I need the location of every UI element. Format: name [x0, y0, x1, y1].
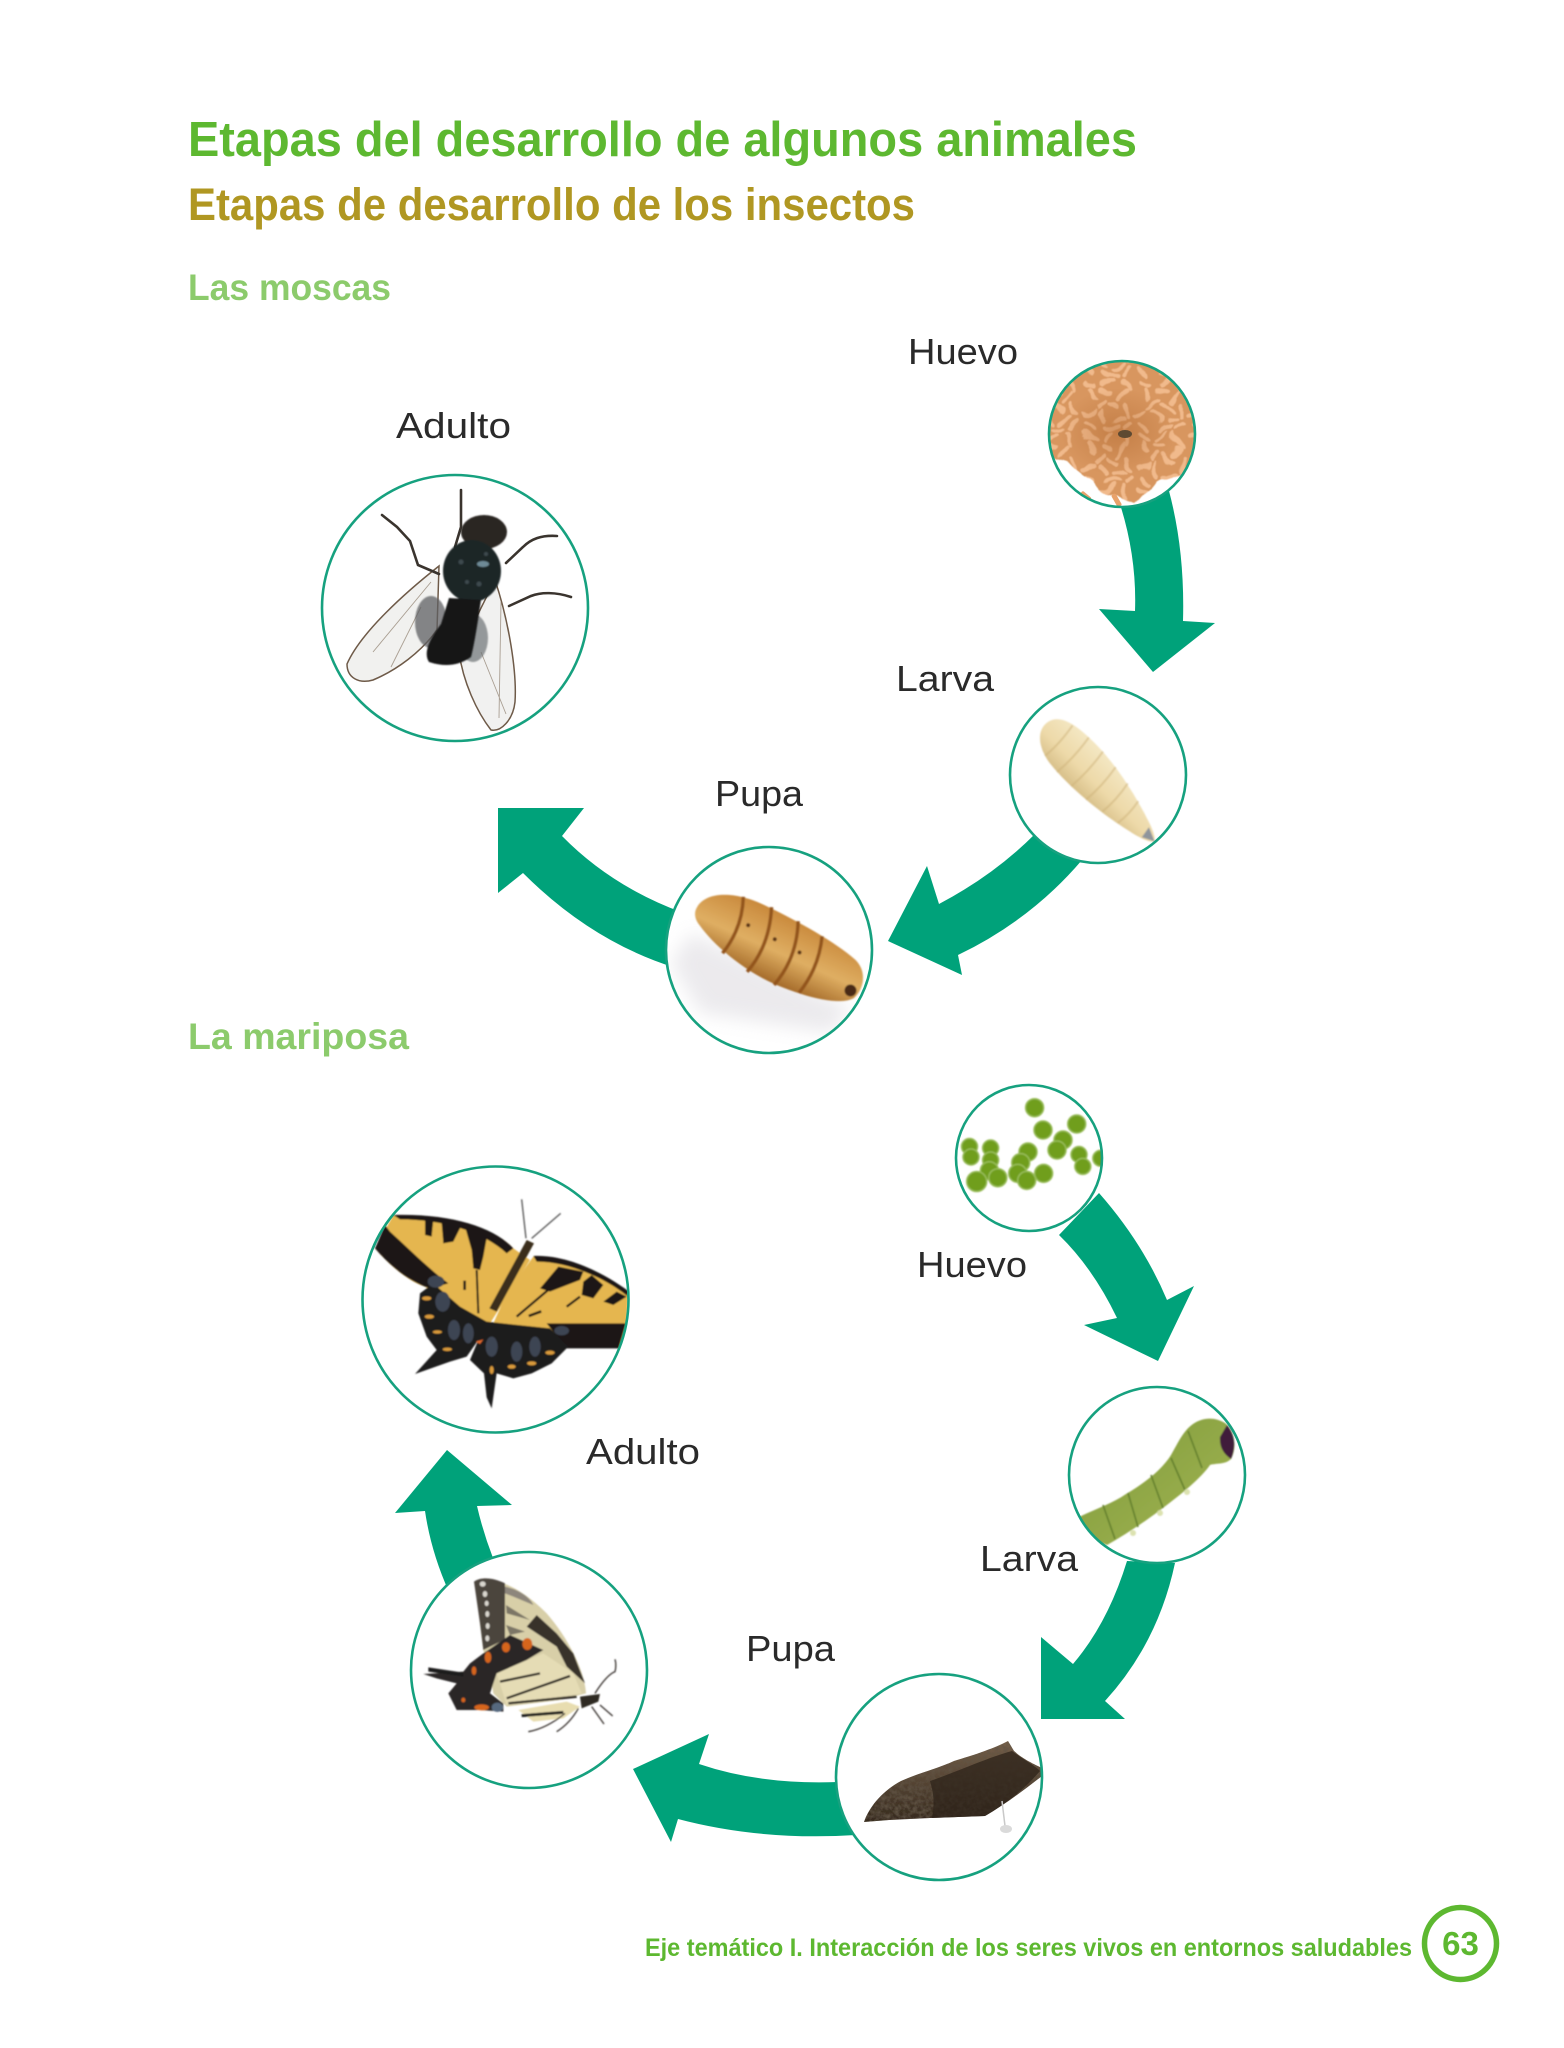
- photo: adult fly legs: [382, 490, 571, 606]
- circle: fly pupa: [667, 894, 864, 1033]
- ring: caterpillar: [1069, 1387, 1245, 1563]
- label: Adulto (butterfly): Adulto: [586, 1431, 700, 1472]
- arrow: butterfly side adult to top adult: [395, 1450, 512, 1592]
- ring: butterfly side view: [411, 1552, 647, 1788]
- photo: side-view butterfly: [423, 1578, 616, 1732]
- label: Huevo (fly): Huevo: [908, 331, 1018, 372]
- heading: la mariposa: La mariposa: [188, 1016, 409, 1057]
- circle: butterfly top view: [374, 1198, 628, 1409]
- photo: adult fly body: [427, 515, 507, 665]
- label: Huevo (butterfly): Huevo: [917, 1244, 1027, 1285]
- arrow: butterfly pupa to side adult: [633, 1734, 856, 1842]
- label: Larva (fly): Larva: [896, 658, 995, 699]
- photo: adult fly wings: [347, 566, 515, 730]
- circle: adult fly: [346, 488, 572, 731]
- arrow: fly egg to larva: [1099, 491, 1215, 672]
- page number badge: [1424, 1908, 1496, 1980]
- photo: chrysalis: [864, 1741, 1042, 1833]
- page number badge: 63: [1442, 1925, 1479, 1962]
- ring: butterfly top view: [362, 1166, 628, 1432]
- circle: chrysalis: [838, 1741, 1041, 1835]
- circle: butterfly eggs: [960, 1097, 1101, 1194]
- title: Etapas del desarrollo de algunos animales: [188, 113, 1137, 167]
- footer text: Eje temático I. Interacción de los seres vivos en entornos saludables: [645, 1934, 1412, 1962]
- ring: fly larva: [1010, 687, 1186, 863]
- arrow: butterfly egg to larva: [1059, 1193, 1194, 1361]
- arrow: fly larva to pupa: [888, 834, 1082, 975]
- arrow: fly pupa to adult: [498, 808, 681, 967]
- photo: top-view butterfly: [375, 1199, 628, 1408]
- infographic page: [190, 120, 1500, 1982]
- label: Pupa (fly): Pupa: [715, 773, 804, 814]
- ring: adult fly: [322, 475, 588, 741]
- photo: fly pupa: [694, 894, 864, 1002]
- photo: green eggs: [962, 1099, 1109, 1192]
- photo: fly larva: [1039, 718, 1156, 842]
- ring: chrysalis: [836, 1674, 1042, 1880]
- photo: caterpillar: [1079, 1419, 1234, 1545]
- arrow: butterfly larva to pupa: [1041, 1561, 1175, 1719]
- circle: caterpillar: [1080, 1418, 1236, 1546]
- circle: butterfly side view: [423, 1560, 618, 1734]
- ring: fly pupa: [666, 847, 872, 1053]
- ring: fly egg: [1049, 361, 1195, 507]
- ring: butterfly egg: [956, 1085, 1102, 1231]
- photo: fly eggs: [1050, 362, 1194, 506]
- label: Adulto (fly): Adulto: [396, 405, 511, 446]
- subtitle: Etapas de desarrollo de los insectos: [188, 179, 915, 230]
- label: Larva (butterfly): Larva: [980, 1538, 1079, 1579]
- label: Pupa (butterfly): Pupa: [746, 1628, 836, 1669]
- circle: fly larva: [1034, 718, 1156, 860]
- heading: las moscas: Las moscas: [188, 267, 391, 308]
